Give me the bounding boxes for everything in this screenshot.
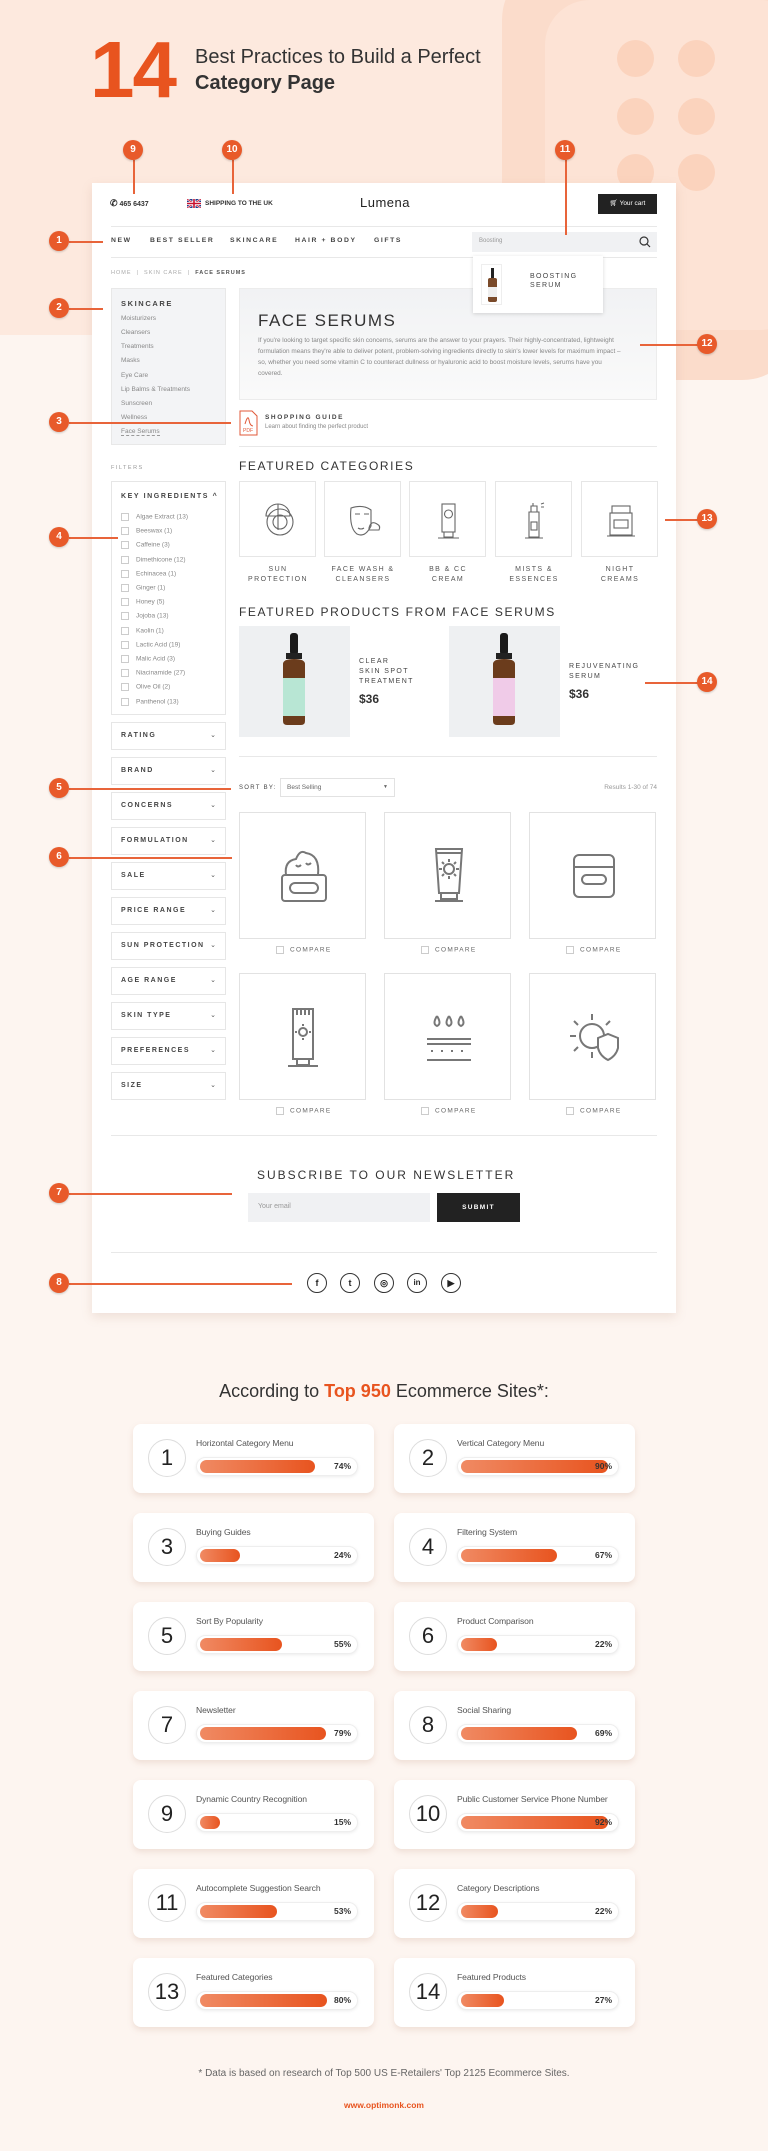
autocomplete dropdown: BOOSTING [530, 273, 577, 280]
key ingredients filter: Panthenol (13) [136, 699, 179, 706]
text: 22% [595, 1639, 612, 1649]
stat cards [133, 1424, 374, 1493]
text: 12 [416, 1890, 440, 1915]
filter accordions: ⌄ [210, 767, 216, 774]
text: 4 [422, 1534, 434, 1559]
key ingredients filter: Niacinamide (27) [136, 670, 185, 677]
featured product 2: REJUVENATING [569, 663, 639, 670]
sidebar category menu: Treatments [121, 343, 154, 350]
social icons: t [348, 1278, 352, 1288]
search box [472, 232, 657, 252]
stat cards: Horizontal Category Menu [196, 1438, 293, 1448]
filter accordions: SKIN TYPE [121, 1012, 171, 1019]
header: shipping [187, 199, 273, 208]
text: Newsletter [196, 1705, 236, 1715]
background top peach [0, 0, 768, 335]
filter accordions: ⌄ [210, 907, 216, 914]
featured categories row: CREAM [432, 576, 464, 583]
search box: Boosting [479, 238, 502, 244]
text: 9 [161, 1801, 173, 1826]
text: 90% [595, 1461, 612, 1471]
text: 11 [560, 144, 570, 155]
autocomplete dropdown [473, 256, 603, 313]
filter accordions: ⌄ [210, 977, 216, 984]
filter accordions: RATING [121, 732, 156, 739]
sidebar category menu: SKINCARE [121, 299, 173, 308]
filter accordions: ⌄ [210, 1012, 216, 1019]
text: 27% [595, 1995, 612, 2005]
mockup card [92, 183, 676, 1313]
key ingredients filter: Honey (5) [136, 599, 165, 606]
title text: Best Practices to Build a Perfect [195, 46, 481, 68]
text: 69% [595, 1728, 612, 1738]
text: 4 [56, 531, 62, 542]
text: 67% [595, 1550, 612, 1560]
shopping guide: Learn about finding the perfect product [265, 424, 368, 430]
text: Category Descriptions [457, 1883, 539, 1893]
cart button: 🛒︎ Your cart [610, 200, 645, 207]
product grid: COMPARE [290, 947, 331, 954]
featured categories row: PROTECTION [248, 576, 308, 583]
featured categories row: MISTS & [515, 566, 553, 573]
nav menu: GIFTS [374, 237, 402, 244]
featured categories row: BB & CC [429, 566, 467, 573]
featured product 2 [449, 626, 639, 737]
filter accordions: ⌄ [210, 802, 216, 809]
text: Featured Products [457, 1972, 526, 1982]
breadcrumb: HOME | SKIN CARE | FACE SERUMS [111, 270, 246, 276]
product grid: COMPARE [435, 1108, 476, 1115]
filter accordions: CONCERNS [121, 802, 173, 809]
text: Product Comparison [457, 1616, 534, 1626]
nav menu: SKINCARE [230, 237, 278, 244]
text: 24% [334, 1550, 351, 1560]
featured categories row: CLEANSERS [335, 576, 390, 583]
text: 1 [56, 235, 62, 246]
social icons: ◎ [380, 1278, 388, 1288]
text: Sort By Popularity [196, 1616, 263, 1626]
title text: Category Page [195, 72, 335, 94]
text: Public Customer Service Phone Number [457, 1794, 608, 1804]
text: 15% [334, 1817, 351, 1827]
key ingredients filter: Dimethicone (12) [136, 557, 186, 564]
featured categories row: CREAMS [601, 576, 639, 583]
product grid: COMPARE [580, 947, 621, 954]
filter accordions: SUN PROTECTION [121, 942, 205, 949]
key ingredients filter: Jojoba (13) [136, 613, 169, 620]
text: 5 [56, 782, 62, 793]
key ingredients filter: KEY INGREDIENTS ^ [121, 493, 218, 500]
category description panel [239, 288, 657, 400]
filter accordions: SIZE [121, 1082, 143, 1089]
text: 7 [161, 1712, 173, 1737]
shopping guide: SHOPPING GUIDE [265, 414, 344, 421]
featured products heading: FEATURED PRODUCTS FROM FACE SERUMS [239, 605, 556, 619]
text: 8 [56, 1277, 62, 1288]
featured product 2: SERUM [569, 673, 601, 680]
newsletter: Your email [258, 1203, 291, 1210]
footer url: www.optimonk.com [344, 2100, 424, 2110]
autocomplete dropdown: SERUM [530, 282, 562, 289]
filter accordions [111, 722, 226, 1100]
shopping guide: PDF [243, 428, 253, 434]
sort by control: SORT BY: [239, 785, 277, 791]
featured product 1 [239, 626, 414, 737]
key ingredients filter [111, 481, 226, 715]
text: 13 [155, 1979, 179, 2004]
sidebar category menu: Masks [121, 357, 140, 364]
stat cards: 1 [161, 1445, 173, 1470]
social icons: in [413, 1278, 421, 1287]
nav menu: BEST SELLER [150, 237, 214, 244]
logo: Lumena [360, 195, 410, 210]
text: 80% [334, 1995, 351, 2005]
text: 79% [334, 1728, 351, 1738]
product grid [239, 812, 656, 1115]
filter accordions: ⌄ [210, 837, 216, 844]
sort by control: ▼ [383, 784, 388, 790]
featured categories row: FACE WASH & [332, 566, 394, 573]
text: Social Sharing [457, 1705, 511, 1715]
decorative dots [617, 40, 715, 191]
markers: 9 [130, 144, 136, 155]
text: 14 [701, 676, 713, 687]
featured product 1: TREATMENT [359, 678, 414, 685]
featured product 1: SKIN SPOT [359, 668, 409, 675]
text: Buying Guides [196, 1527, 251, 1537]
key ingredients filter: Malic Acid (3) [136, 656, 175, 663]
sidebar category menu: Wellness [121, 414, 147, 421]
text: 22% [595, 1906, 612, 1916]
key ingredients filter: Echinacea (1) [136, 571, 176, 578]
key ingredients filter: Lactic Acid (19) [136, 642, 180, 649]
filter accordions: ⌄ [210, 732, 216, 739]
text: Featured Categories [196, 1972, 272, 1982]
newsletter [248, 1168, 520, 1222]
text: 14 [416, 1979, 440, 2004]
sidebar category menu: Moisturizers [121, 315, 156, 322]
featured categories row [239, 481, 658, 583]
stats heading: According to Top 950 Ecommerce Sites*: [219, 1381, 549, 1401]
text: 10 [226, 144, 238, 155]
title text [195, 46, 481, 94]
filter accordions: ⌄ [210, 1082, 216, 1089]
text: 92% [595, 1817, 612, 1827]
key ingredients filter: Kaolin (1) [136, 628, 164, 635]
filter accordions: PREFERENCES [121, 1047, 190, 1054]
text: Dynamic Country Recognition [196, 1794, 307, 1804]
featured categories row: ESSENCES [509, 576, 559, 583]
sidebar category menu [111, 288, 226, 445]
filter accordions: ⌄ [210, 942, 216, 949]
nav menu [111, 237, 402, 244]
text: 13 [701, 513, 713, 524]
text: 12 [701, 338, 713, 349]
filter accordions: SALE [121, 872, 146, 879]
category description panel: FACE SERUMS [258, 311, 396, 330]
featured categories row: SUN [268, 566, 287, 573]
sidebar category menu: Sunscreen [121, 400, 152, 407]
category description panel: If you're looking to target specific skin concerns, serums are the answer to your prayers. Their highly-concentrated, lightweight formulation means they're able to deliver potent, problem-solving ingredients directly to skin's lower levels for maximum impact – so, whether you need some vitamin C to counteract dullness or hyaluronic acid to boost moisture levels, serums have you covered. [258, 337, 621, 377]
sidebar category menu: Lip Balms & Treatments [121, 386, 190, 393]
featured categories heading: FEATURED CATEGORIES [239, 459, 414, 473]
title number 14: 14 [90, 25, 175, 114]
text: 55% [334, 1639, 351, 1649]
product grid: COMPARE [290, 1108, 331, 1115]
text: 7 [56, 1187, 62, 1198]
text: Autocomplete Suggestion Search [196, 1883, 321, 1893]
filters label: FILTERS [111, 465, 144, 471]
text: 5 [161, 1623, 173, 1648]
footnote: * Data is based on research of Top 500 US E-Retailers' Top 2125 Ecommerce Sites. [198, 2068, 570, 2079]
filter accordions: PRICE RANGE [121, 907, 186, 914]
nav menu: NEW [111, 237, 132, 244]
product grid: COMPARE [435, 947, 476, 954]
text: 3 [161, 1534, 173, 1559]
header: shipping: SHIPPING TO THE UK [205, 200, 273, 207]
markers [123, 140, 143, 160]
filter accordions: ⌄ [210, 872, 216, 879]
social icons: f [316, 1278, 318, 1288]
featured product 1: $36 [359, 692, 379, 706]
text: 8 [422, 1712, 434, 1737]
key ingredients filter: Caffeine (3) [136, 542, 170, 549]
text: Filtering System [457, 1527, 517, 1537]
key ingredients filter: Ginger (1) [136, 585, 165, 592]
text: Vertical Category Menu [457, 1438, 544, 1448]
nav menu: HAIR + BODY [295, 237, 357, 244]
text: 6 [422, 1623, 434, 1648]
key ingredients filter: Beeswax (1) [136, 528, 172, 535]
stat cards: 74% [334, 1461, 351, 1471]
key ingredients filter: Algae Extract (13) [136, 514, 188, 521]
sidebar category menu: Eye Care [121, 372, 148, 379]
featured product 2: $36 [569, 687, 589, 701]
filter accordions: ⌄ [210, 1047, 216, 1054]
sort by control: Results 1-30 of 74 [604, 784, 657, 791]
key ingredients filter: Olive Oil (2) [136, 684, 170, 691]
header: phone: ✆ 465 6437 [110, 198, 149, 208]
text: 11 [156, 1890, 178, 1915]
cart button [598, 194, 657, 214]
decorative shape [502, 0, 768, 380]
shopping guide [240, 410, 368, 436]
sidebar category menu: Face Serums [121, 428, 160, 435]
filter accordions: FORMULATION [121, 837, 189, 844]
text: 3 [56, 416, 62, 427]
newsletter: SUBSCRIBE TO OUR NEWSLETTER [257, 1168, 515, 1182]
sort by control [239, 778, 657, 797]
filter accordions: AGE RANGE [121, 977, 177, 984]
sidebar category menu: Cleansers [121, 329, 150, 336]
text: 53% [334, 1906, 351, 1916]
marker lines [133, 160, 134, 194]
newsletter: SUBMIT [462, 1204, 495, 1211]
sort by control: Best Selling [287, 784, 321, 791]
product grid: COMPARE [580, 1108, 621, 1115]
text: 2 [422, 1445, 434, 1470]
filter accordions: BRAND [121, 767, 154, 774]
text: 10 [416, 1801, 440, 1826]
social icons: ▶ [448, 1278, 454, 1288]
text: 6 [56, 851, 62, 862]
social icons [307, 1273, 461, 1293]
featured categories row: NIGHT [606, 566, 634, 573]
featured product 1: CLEAR [359, 658, 389, 665]
text: 2 [56, 302, 62, 313]
